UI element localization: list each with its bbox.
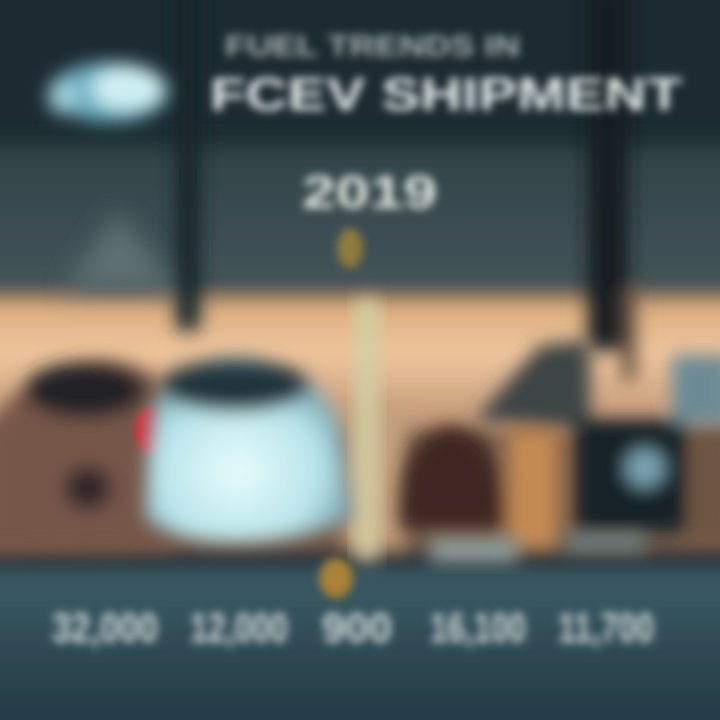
vertical pillars	[176, 0, 636, 380]
bottom stats row: 32,000	[52, 604, 158, 651]
bottom stats row: 12,000	[190, 604, 288, 651]
white car	[145, 356, 352, 542]
icon: yellow marker	[337, 228, 363, 268]
right brown figures	[400, 340, 720, 548]
icon: red dot	[134, 407, 170, 453]
icon: pole base marker	[319, 558, 353, 598]
upper stat labels	[430, 532, 645, 562]
left brown car	[0, 360, 175, 552]
bottom stats row: 16,100	[430, 604, 526, 651]
icon: faint triangle	[65, 210, 175, 290]
title: FCEV SHIPMENT	[210, 68, 682, 120]
title: FUEL TRENDS IN	[225, 30, 520, 63]
bottom stats row: 11,700	[558, 604, 654, 651]
bottom stats row	[52, 604, 654, 651]
title	[210, 30, 682, 120]
bottom stats row: 900	[322, 604, 392, 651]
timeline pole	[356, 300, 378, 560]
icon: logo glow	[48, 62, 168, 122]
year heading: 2019	[302, 166, 437, 218]
